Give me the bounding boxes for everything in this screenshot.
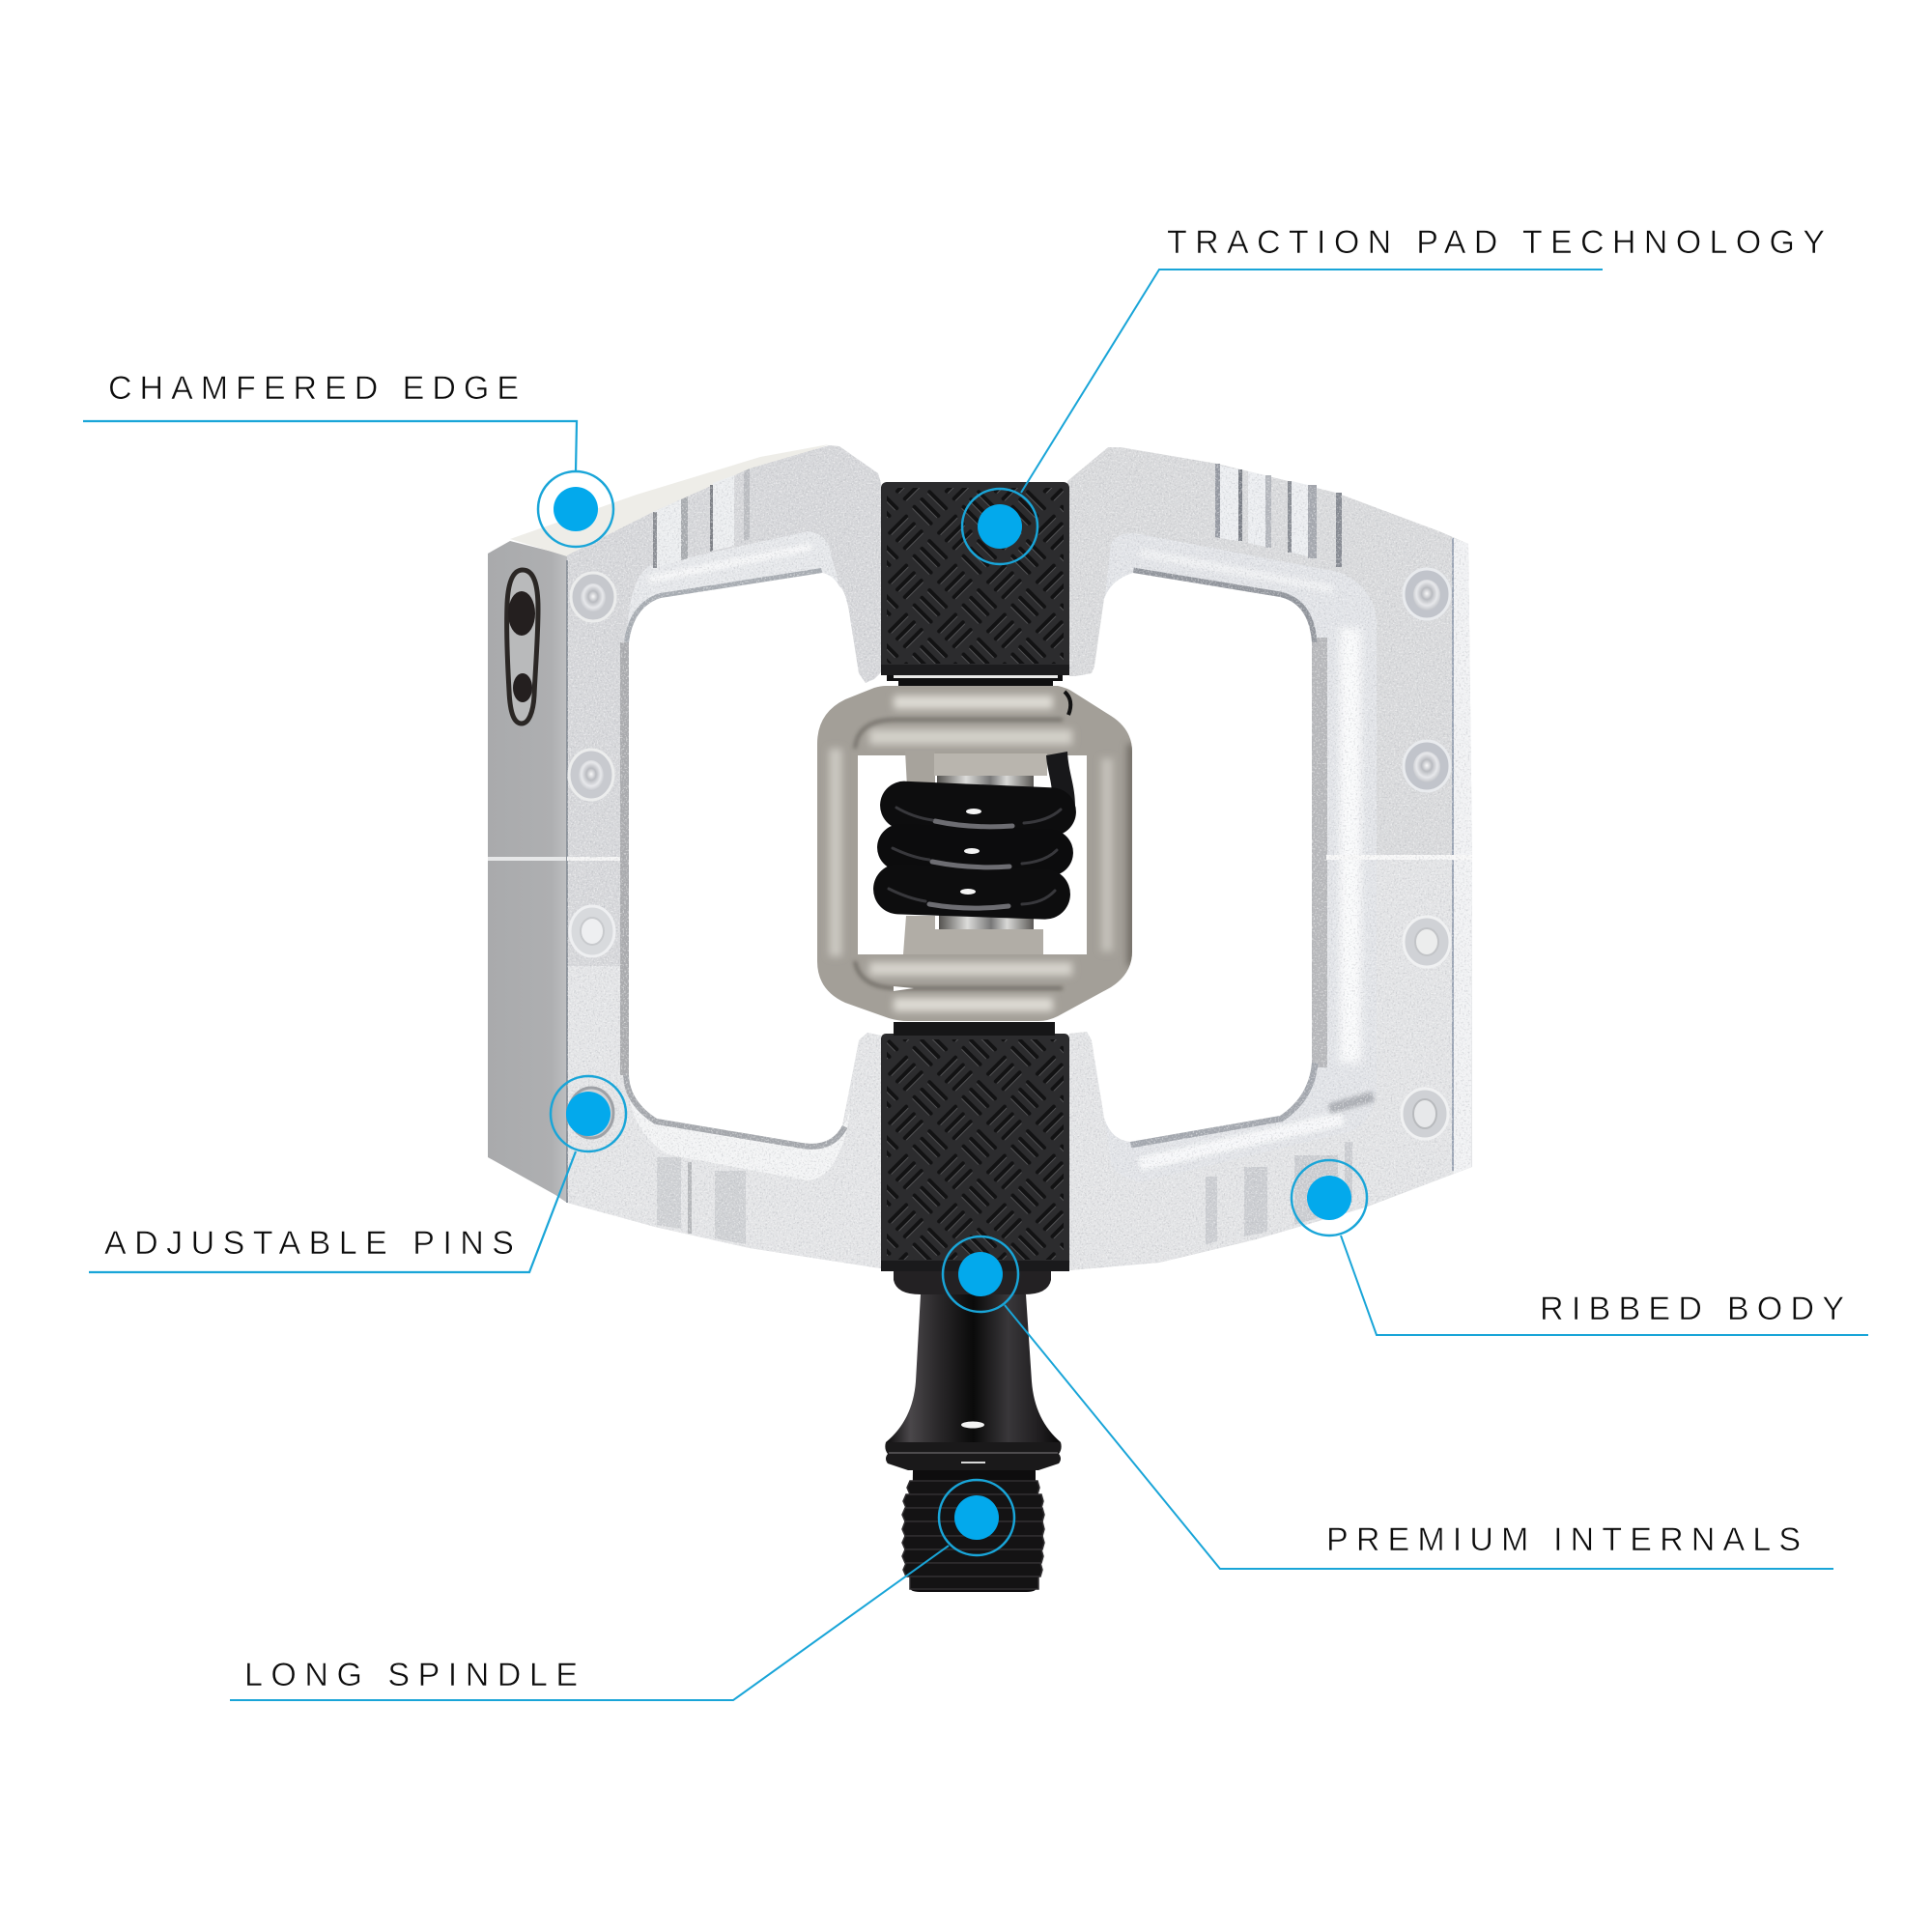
mechanism: cage and spring xyxy=(817,686,1132,1021)
lower left frame lighter zone xyxy=(567,966,881,1268)
marker dot xyxy=(954,1495,999,1540)
left frame xyxy=(567,445,881,1268)
leader line xyxy=(89,1151,576,1272)
fixing screws xyxy=(569,569,1450,1139)
metal grain texture xyxy=(565,440,1478,1275)
cage shading xyxy=(836,702,1132,1005)
label text: ADJUSTABLE PINS xyxy=(104,1225,514,1262)
right frame bevel xyxy=(1104,533,1377,1182)
lower shaft xyxy=(939,913,1034,929)
bevel highlights xyxy=(1340,628,1361,1063)
spindle thread xyxy=(902,1470,1044,1592)
spring coil xyxy=(872,781,1077,921)
lower bracket xyxy=(903,916,1043,954)
bearing disc under top pad xyxy=(887,675,1063,688)
screw 8 xyxy=(1402,1089,1448,1139)
marker ring xyxy=(551,1076,626,1151)
marker dot xyxy=(566,1092,611,1136)
spring wire end xyxy=(1046,752,1075,807)
spindle xyxy=(885,1271,1062,1592)
icon: brand logo xyxy=(507,570,538,724)
callout: ribbed body xyxy=(1292,1160,1868,1335)
spindle flange xyxy=(885,1442,1062,1470)
upper shaft xyxy=(937,776,1034,807)
marker ring xyxy=(1292,1160,1367,1236)
callout: premium internals xyxy=(943,1236,1833,1569)
right edge strip xyxy=(1454,538,1472,1174)
leader line xyxy=(83,421,577,471)
marker dot xyxy=(1307,1176,1351,1220)
marker ring xyxy=(962,489,1037,564)
cage body xyxy=(817,686,1132,1021)
marker dot xyxy=(978,504,1022,549)
ribs top left xyxy=(653,469,750,568)
leader line xyxy=(1021,270,1603,493)
label text: PREMIUM INTERNALS xyxy=(1326,1521,1801,1558)
pedal illustration xyxy=(488,440,1478,1592)
left side face with logo xyxy=(488,541,567,1203)
callout: traction pad technology xyxy=(962,224,1825,564)
ribs top right xyxy=(1215,464,1342,567)
spindle collar xyxy=(894,1271,1051,1294)
screw 3 xyxy=(570,906,614,956)
label text: CHAMFERED EDGE xyxy=(108,370,519,407)
bottom traction pad xyxy=(881,1022,1069,1271)
marker ring xyxy=(943,1236,1018,1312)
callout: chamfered edge xyxy=(83,370,613,547)
leader line xyxy=(1005,1305,1833,1569)
marker dot xyxy=(554,487,598,531)
label text: LONG SPINDLE xyxy=(244,1657,578,1693)
screw 1 xyxy=(571,573,615,621)
chamfered top edge xyxy=(510,444,829,556)
marker ring xyxy=(939,1480,1014,1555)
screw 5 xyxy=(1404,569,1450,619)
screw 7 xyxy=(1404,917,1450,967)
marker ring xyxy=(538,471,613,547)
marker dot xyxy=(958,1252,1003,1296)
callout: adjustable pins xyxy=(89,1076,626,1272)
screw 6 xyxy=(1404,741,1450,791)
ribs bottom left xyxy=(657,1157,746,1244)
top traction pad xyxy=(881,482,1069,675)
spring arm xyxy=(1065,692,1070,715)
window opening xyxy=(629,573,859,1144)
screw 4 xyxy=(569,1088,613,1138)
label text: TRACTION PAD TECHNOLOGY xyxy=(1167,224,1825,261)
callout: long spindle xyxy=(230,1480,1014,1700)
window inner walls xyxy=(620,642,638,1075)
glassy bevel around window, bottom xyxy=(626,1072,850,1180)
leader line xyxy=(1341,1236,1868,1335)
screw 2 xyxy=(569,750,613,800)
ribs bottom right xyxy=(1206,1142,1352,1244)
leader line xyxy=(230,1546,949,1700)
window inner walls xyxy=(1296,638,1327,1067)
right frame xyxy=(1067,447,1472,1270)
side strip line xyxy=(566,560,568,1203)
spindle neck xyxy=(886,1294,1061,1442)
glassy bevel around window, top xyxy=(626,531,839,647)
window opening xyxy=(1092,573,1312,1142)
label text: RIBBED BODY xyxy=(1540,1291,1844,1327)
upper bracket xyxy=(905,751,1047,787)
